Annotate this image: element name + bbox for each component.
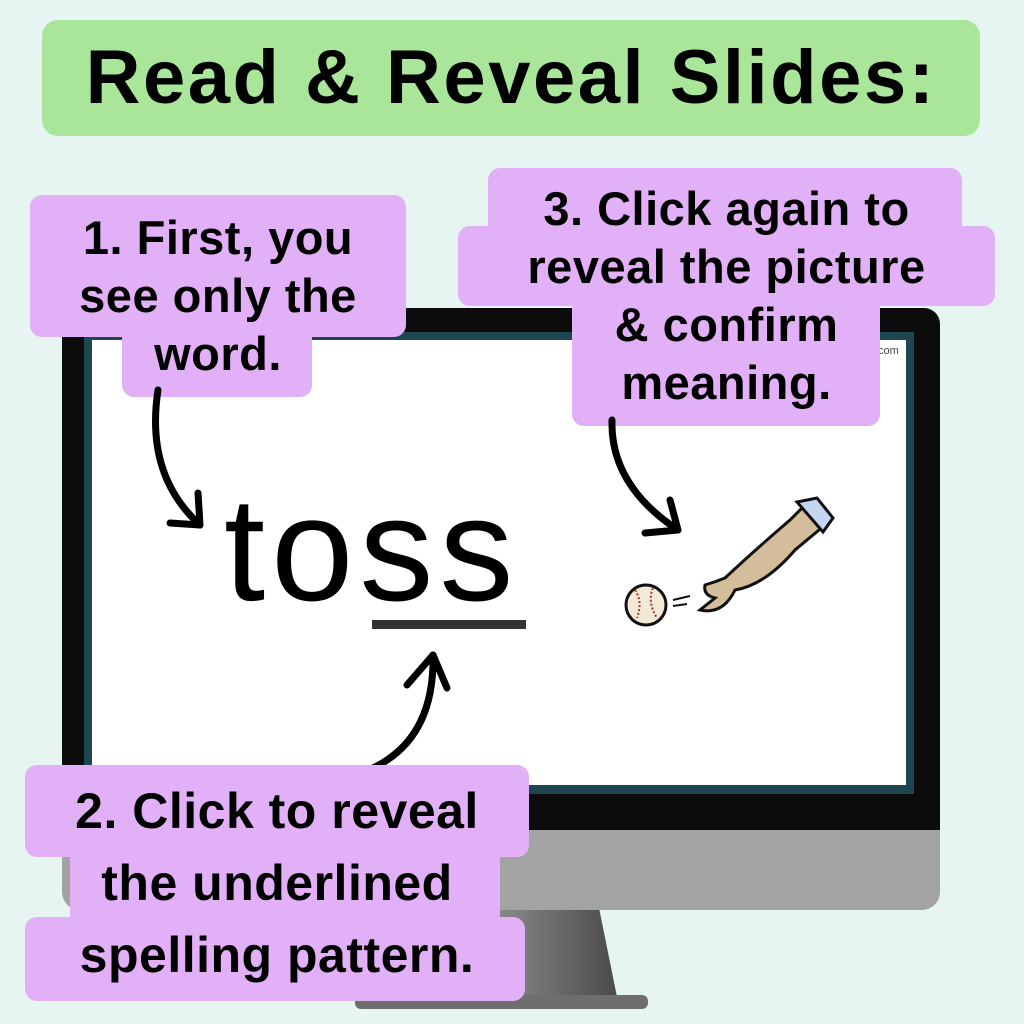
callout 1: 1. First, you [83, 211, 353, 264]
underline [372, 620, 526, 629]
word: toss: toss [224, 467, 519, 632]
screen [92, 340, 906, 785]
title [42, 20, 980, 136]
monitor base [355, 995, 648, 1009]
callout 2: 2. Click to reveal [75, 783, 479, 839]
callout 1: see only the [79, 269, 357, 322]
title: Read & Reveal Slides: [86, 35, 936, 120]
illustration: ball and arm [624, 496, 835, 626]
callout 3: & confirm [615, 298, 838, 351]
arrow 1 [152, 386, 204, 528]
monitor stand [500, 910, 617, 995]
arrow 2 [371, 652, 450, 765]
arrow 3 [608, 416, 682, 536]
callout 3: meaning. [621, 356, 832, 409]
callout 3: 3. Click again to [543, 182, 910, 235]
callout 3 [458, 168, 995, 426]
callout 1: word. [154, 327, 282, 380]
callout 3: reveal the picture [527, 240, 926, 293]
monitor: com [878, 345, 899, 357]
monitor bezel [62, 308, 940, 830]
callout 2 [25, 765, 529, 1001]
screen border [84, 332, 914, 794]
callout 2: spelling pattern. [80, 927, 474, 983]
monitor [62, 308, 940, 1009]
callout 2: the underlined [101, 855, 453, 911]
monitor chin [62, 800, 940, 910]
callout 1 [30, 195, 406, 397]
